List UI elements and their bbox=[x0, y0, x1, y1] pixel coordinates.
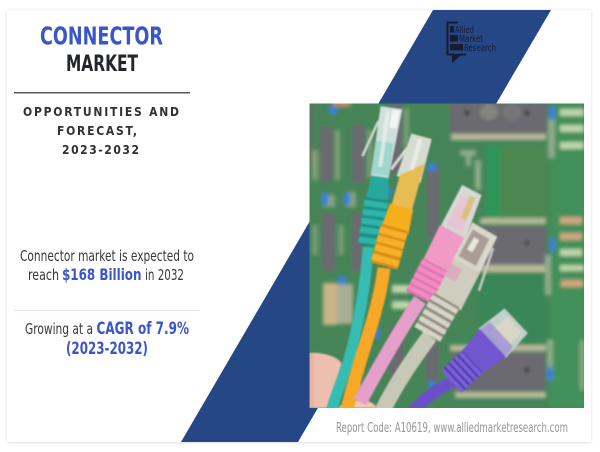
CAGR text: Growing at a bbox=[25, 320, 93, 338]
diagonal blue band bbox=[181, 10, 551, 442]
market size text bbox=[20, 247, 194, 284]
circuit board bbox=[309, 101, 584, 408]
title: CONNECTOR bbox=[40, 22, 163, 50]
text divider bbox=[14, 310, 200, 311]
logo: Allied Market Research: Allied bbox=[455, 25, 474, 36]
misc pads bbox=[460, 118, 584, 390]
blue capacitors bbox=[322, 105, 555, 389]
title bbox=[40, 22, 163, 77]
logo: Allied Market Research bbox=[448, 22, 496, 62]
logo: Allied Market Research: Market bbox=[459, 34, 483, 45]
subtitle: FORECAST, bbox=[57, 124, 137, 138]
chip pins bbox=[312, 108, 546, 398]
cable: grey bbox=[382, 222, 507, 412]
cable: teal bbox=[332, 105, 402, 410]
photo: ethernet cables over circuit board bbox=[309, 101, 585, 412]
cable: orange bbox=[347, 131, 435, 410]
market size text: in 2032 bbox=[145, 266, 184, 284]
CAGR text: (2023-2032) bbox=[66, 339, 148, 358]
resistors bbox=[392, 109, 584, 309]
title divider bbox=[14, 92, 190, 94]
title: MARKET bbox=[66, 52, 138, 77]
CAGR text bbox=[25, 319, 189, 358]
cable: pink bbox=[360, 184, 489, 402]
tan component bbox=[323, 283, 337, 325]
cable: purple bbox=[412, 306, 530, 412]
hand bbox=[309, 353, 377, 408]
chips bbox=[320, 103, 547, 391]
subtitle bbox=[23, 105, 179, 157]
subtitle: 2023-2032 bbox=[62, 143, 139, 157]
logo: Allied Market Research: Research bbox=[464, 43, 496, 54]
market size text: $168 Billion bbox=[62, 265, 142, 284]
market size text: reach bbox=[28, 266, 59, 284]
CAGR text: CAGR of 7.9% bbox=[96, 319, 189, 338]
subtitle: OPPORTUNITIES AND bbox=[23, 105, 179, 119]
market size text: Connector market is expected to bbox=[20, 247, 194, 265]
